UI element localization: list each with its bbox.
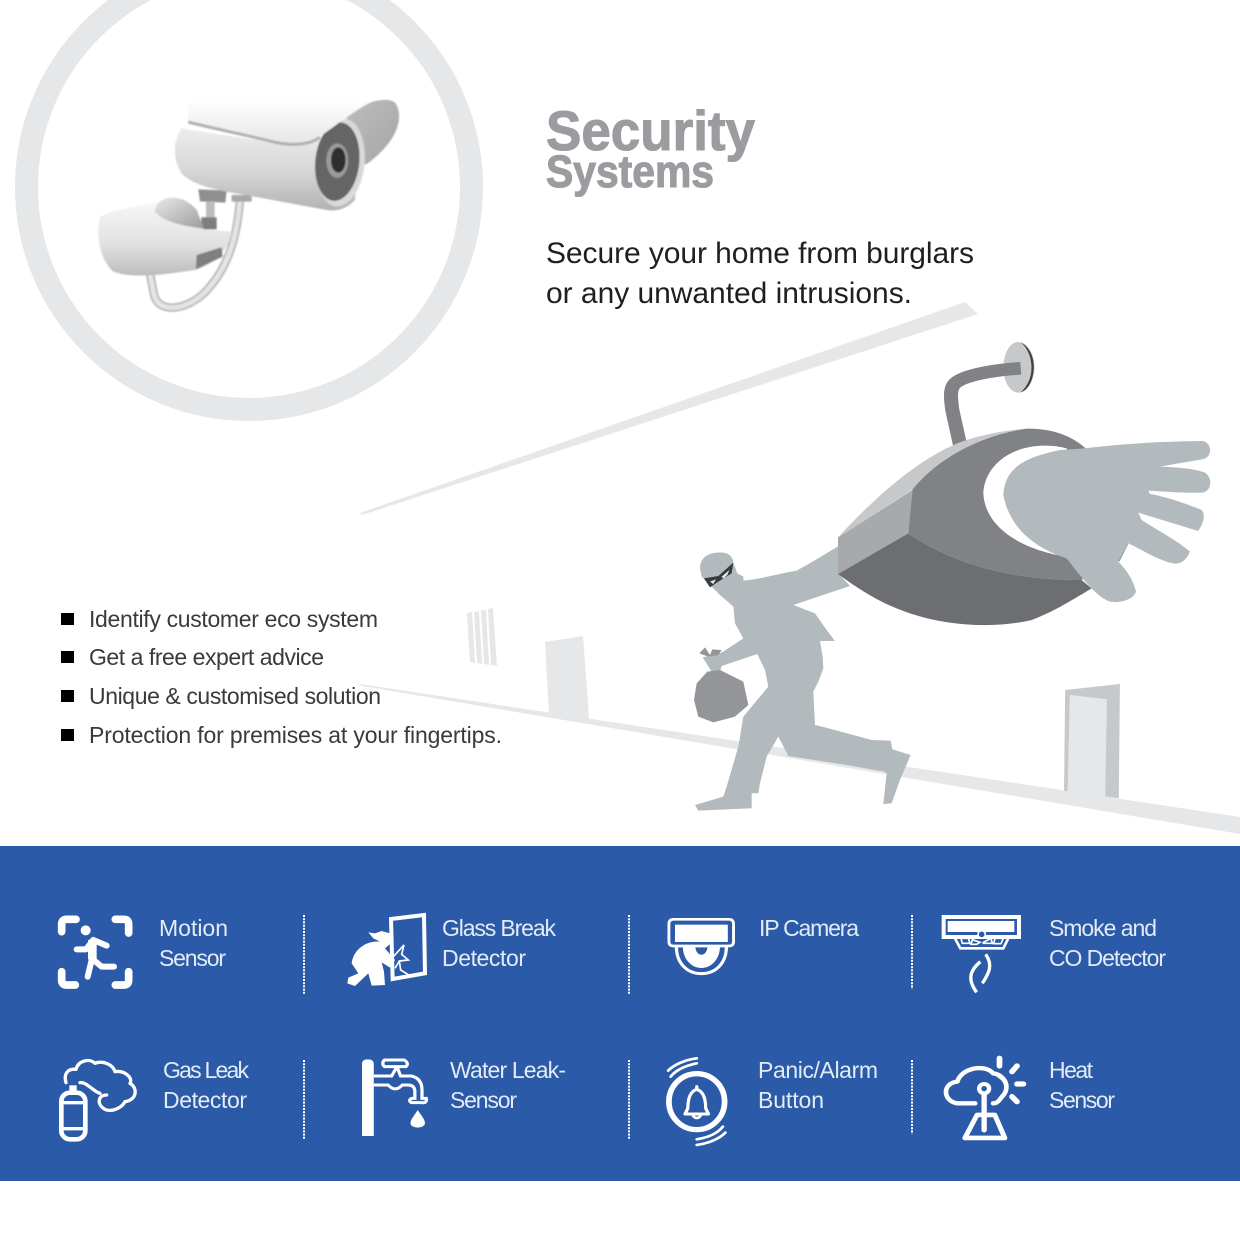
- upper body: [908, 429, 1130, 580]
- body silhouette: [695, 545, 911, 811]
- wall vent: [467, 608, 497, 666]
- label: glass break detector: Glass Break: [442, 915, 556, 941]
- subtitle: [546, 237, 974, 310]
- label: gas leak detector: Detector: [163, 1087, 247, 1113]
- label: water leak sensor: [450, 1057, 566, 1113]
- lens crescent: [983, 446, 1080, 557]
- label: smoke and co detector: CO Detector: [1049, 945, 1166, 971]
- circle frame: [26, 0, 472, 410]
- top sliver: [838, 429, 1022, 537]
- second eye: [722, 570, 729, 579]
- bullet 1: Identify customer eco system: [89, 606, 378, 632]
- label: heat sensor: Heat: [1049, 1057, 1094, 1083]
- label: heat sensor: Sensor: [1049, 1087, 1115, 1113]
- lower body: [838, 533, 1092, 625]
- bullet 4: Protection for premises at your fingertips.: [89, 722, 502, 748]
- label: motion sensor: [159, 915, 228, 971]
- feature list: [61, 606, 502, 748]
- label: smoke and co detector: Smoke and: [1049, 915, 1157, 941]
- subtitle: Secure your home from burglars: [546, 237, 974, 270]
- label: panic alarm button: Button: [758, 1087, 824, 1113]
- icon: ip camera: [669, 919, 734, 974]
- icon: heat sensor: [946, 1058, 1023, 1138]
- loot bag: [694, 670, 748, 722]
- label: water leak sensor: Sensor: [450, 1087, 517, 1113]
- dotted dividers: [304, 915, 912, 1140]
- mask: [704, 563, 733, 587]
- label: motion sensor: Motion: [159, 915, 228, 941]
- sliver behind hand: [1112, 541, 1128, 562]
- bullet 3: Unique & customised solution: [89, 683, 381, 709]
- icon: water leak sensor: [362, 1059, 426, 1136]
- ground band: [360, 684, 1240, 834]
- label: gas leak detector: Gas Leak: [163, 1057, 250, 1083]
- wall mount disc and arm: [951, 342, 1034, 447]
- label: ip camera: IP Camera: [759, 915, 859, 941]
- title: Systems: [546, 146, 714, 197]
- mount disc: [1003, 342, 1034, 393]
- right door: [1064, 684, 1120, 798]
- hand: [1003, 441, 1210, 602]
- icon: motion sensor: [62, 919, 129, 985]
- title: [546, 99, 755, 197]
- label: glass break detector: Detector: [442, 945, 526, 971]
- mount arm: [951, 368, 1021, 447]
- bag tie: [699, 647, 722, 657]
- subtitle: or any unwanted intrusions.: [546, 277, 912, 310]
- label: water leak sensor: Water Leak-: [450, 1057, 566, 1083]
- icon: smoke and co detector: [944, 917, 1019, 992]
- label: panic alarm button: Panic/Alarm: [758, 1057, 878, 1083]
- label: heat sensor: [1049, 1057, 1115, 1113]
- mask eye: [710, 579, 716, 584]
- diagonal ceiling band: [360, 302, 978, 515]
- icon: gas leak detector: [61, 1061, 135, 1139]
- label: smoke and co detector: [1049, 915, 1166, 971]
- label: motion sensor: Sensor: [159, 945, 226, 971]
- label: glass break detector: [442, 915, 556, 971]
- giant camera with hand: [838, 429, 1210, 625]
- title: Security: [546, 99, 755, 162]
- side panel: [838, 489, 913, 574]
- left door: [545, 636, 589, 719]
- blue sensors panel: [0, 846, 1240, 1181]
- label: panic alarm button: [758, 1057, 878, 1113]
- disc edge: [1021, 342, 1034, 392]
- icon: glass break detector: [347, 915, 425, 986]
- bullet 2: Get a free expert advice: [89, 644, 324, 670]
- icon: panic alarm button: [668, 1058, 725, 1145]
- security camera photo: [98, 100, 399, 308]
- label: gas leak detector: [163, 1057, 250, 1113]
- burglar figure: [694, 545, 911, 811]
